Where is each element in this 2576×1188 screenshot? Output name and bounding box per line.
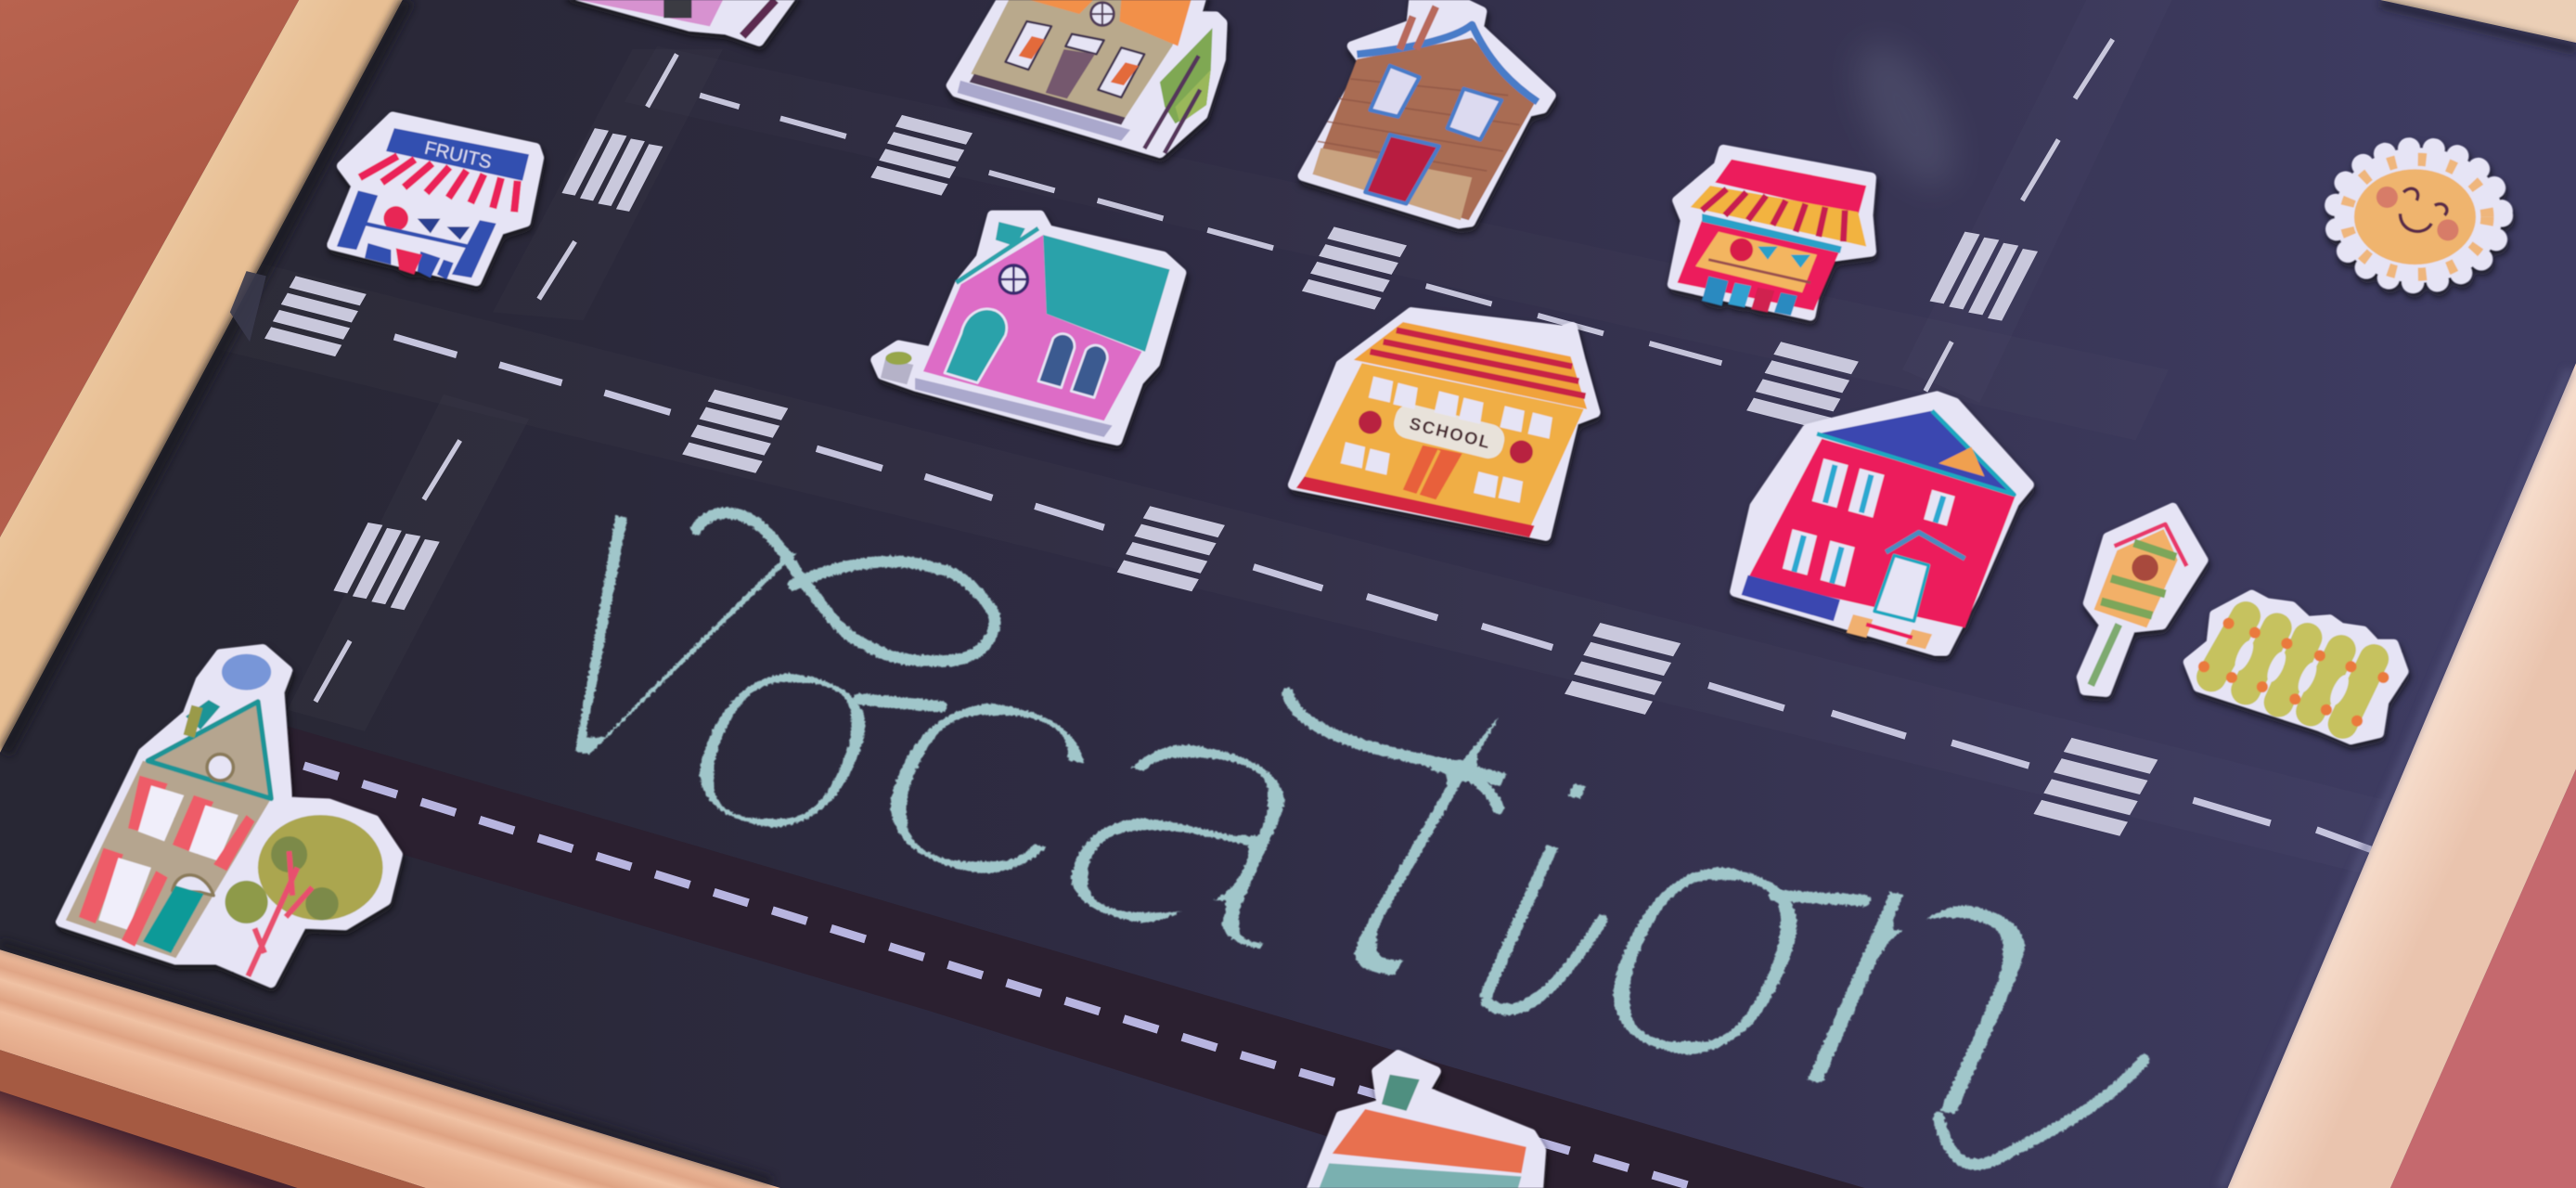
sticker: birdhouse: [2081, 508, 2203, 691]
sticker: school: [1293, 312, 1595, 537]
sticker: red two-storey house: [1735, 396, 2029, 651]
chalk handwritten word: Vocation: o: [625, 542, 960, 911]
sticker: red market stall: [1672, 149, 1871, 316]
sticker: orange house at bottom edge: [1309, 1055, 1541, 1188]
sticker: school: SCHOOL: [1408, 413, 1493, 452]
sticker: picket fence: [2188, 595, 2403, 740]
sticker: pink house with teal roof: [876, 215, 1181, 440]
sticker: smiling sun: [2335, 148, 2502, 283]
chalk handwritten word: Vocation: t: [1254, 596, 1616, 1069]
chalk handwritten word: Vocation: o: [1527, 713, 1907, 1153]
sticker: fruit store: [332, 117, 539, 281]
road dashes and crosswalks: [264, 39, 2371, 1188]
sticker: partial house at top edge: [570, 0, 793, 41]
sticker: brick house: [1303, 0, 1551, 224]
chalk handwritten word: Vocation: i: [1411, 713, 1649, 1081]
sticker: orange-roof house with tree: [951, 0, 1222, 153]
sticker: tall house with tree and cloud: [61, 649, 397, 983]
chalk handwritten word: Vocation: V: [434, 434, 858, 854]
chalk handwritten word: Vocation: c: [802, 558, 1183, 963]
chalk smudge: [1836, 29, 1975, 201]
sticker: fruit store: FRUITS: [422, 138, 494, 174]
chalk handwritten word: Vocation: a: [989, 589, 1412, 1031]
chalk handwritten word: Vocation: [434, 434, 2144, 1188]
